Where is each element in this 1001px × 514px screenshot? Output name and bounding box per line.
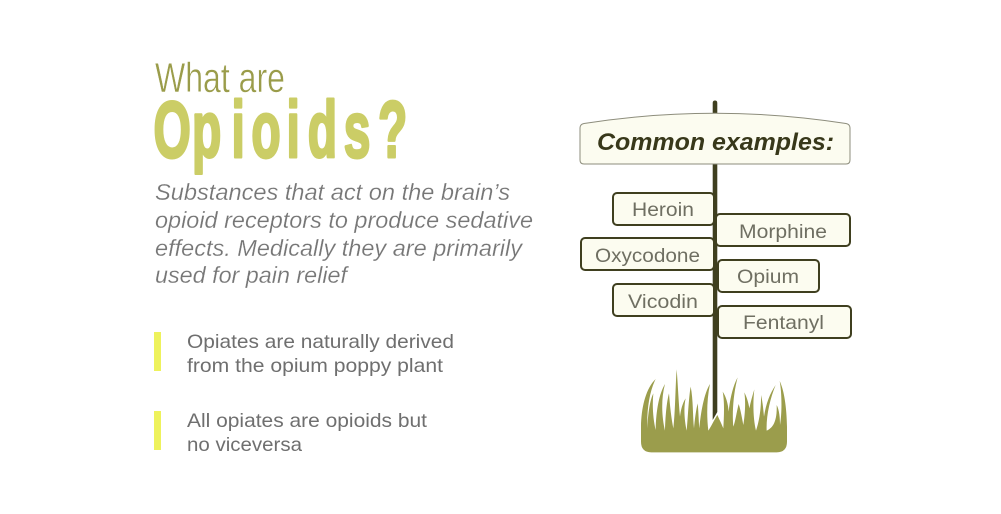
sign: Heroin: Heroin [632, 199, 694, 221]
bullet: opiates and opioids: no viceversa [187, 434, 302, 456]
bullet: opiates and opioids: All opiates are opioids but [187, 410, 428, 432]
definition text block [155, 179, 533, 288]
sign: Morphine: Morphine [739, 221, 827, 243]
sign: Oxycodone: Oxycodone [595, 245, 700, 267]
sign: Morphine [716, 214, 850, 246]
bullet: opiates derivation [154, 331, 454, 377]
icon: grass [641, 369, 787, 452]
bullet: opiates derivation: Opiates are naturally derived [187, 331, 454, 353]
sign: Fentanyl: Fentanyl [743, 312, 824, 334]
title: What are [155, 54, 285, 101]
icon: post [713, 100, 717, 420]
sign: common examples [580, 113, 850, 164]
definition text block: effects. Medically they are primarily [155, 235, 524, 261]
sign: Fentanyl [718, 306, 851, 338]
sign: Opium: Opium [737, 266, 799, 288]
sign: common examples: Common examples: [597, 129, 834, 156]
sign: Vicodin: Vicodin [628, 291, 698, 313]
definition text block: Substances that act on the brain’s [155, 179, 511, 205]
sign: Heroin [613, 193, 714, 225]
definition text block: opioid receptors to produce sedative [155, 207, 533, 233]
bullet: opiates and opioids [154, 410, 428, 456]
definition text block: used for pain relief [155, 262, 350, 288]
bullet: opiates derivation: from the opium poppy plant [187, 355, 444, 377]
title: Opioids? [153, 84, 407, 174]
sign: Oxycodone [581, 238, 714, 270]
sign: Vicodin [613, 284, 714, 316]
sign: Opium [718, 260, 819, 292]
signpost illustration [580, 100, 851, 452]
